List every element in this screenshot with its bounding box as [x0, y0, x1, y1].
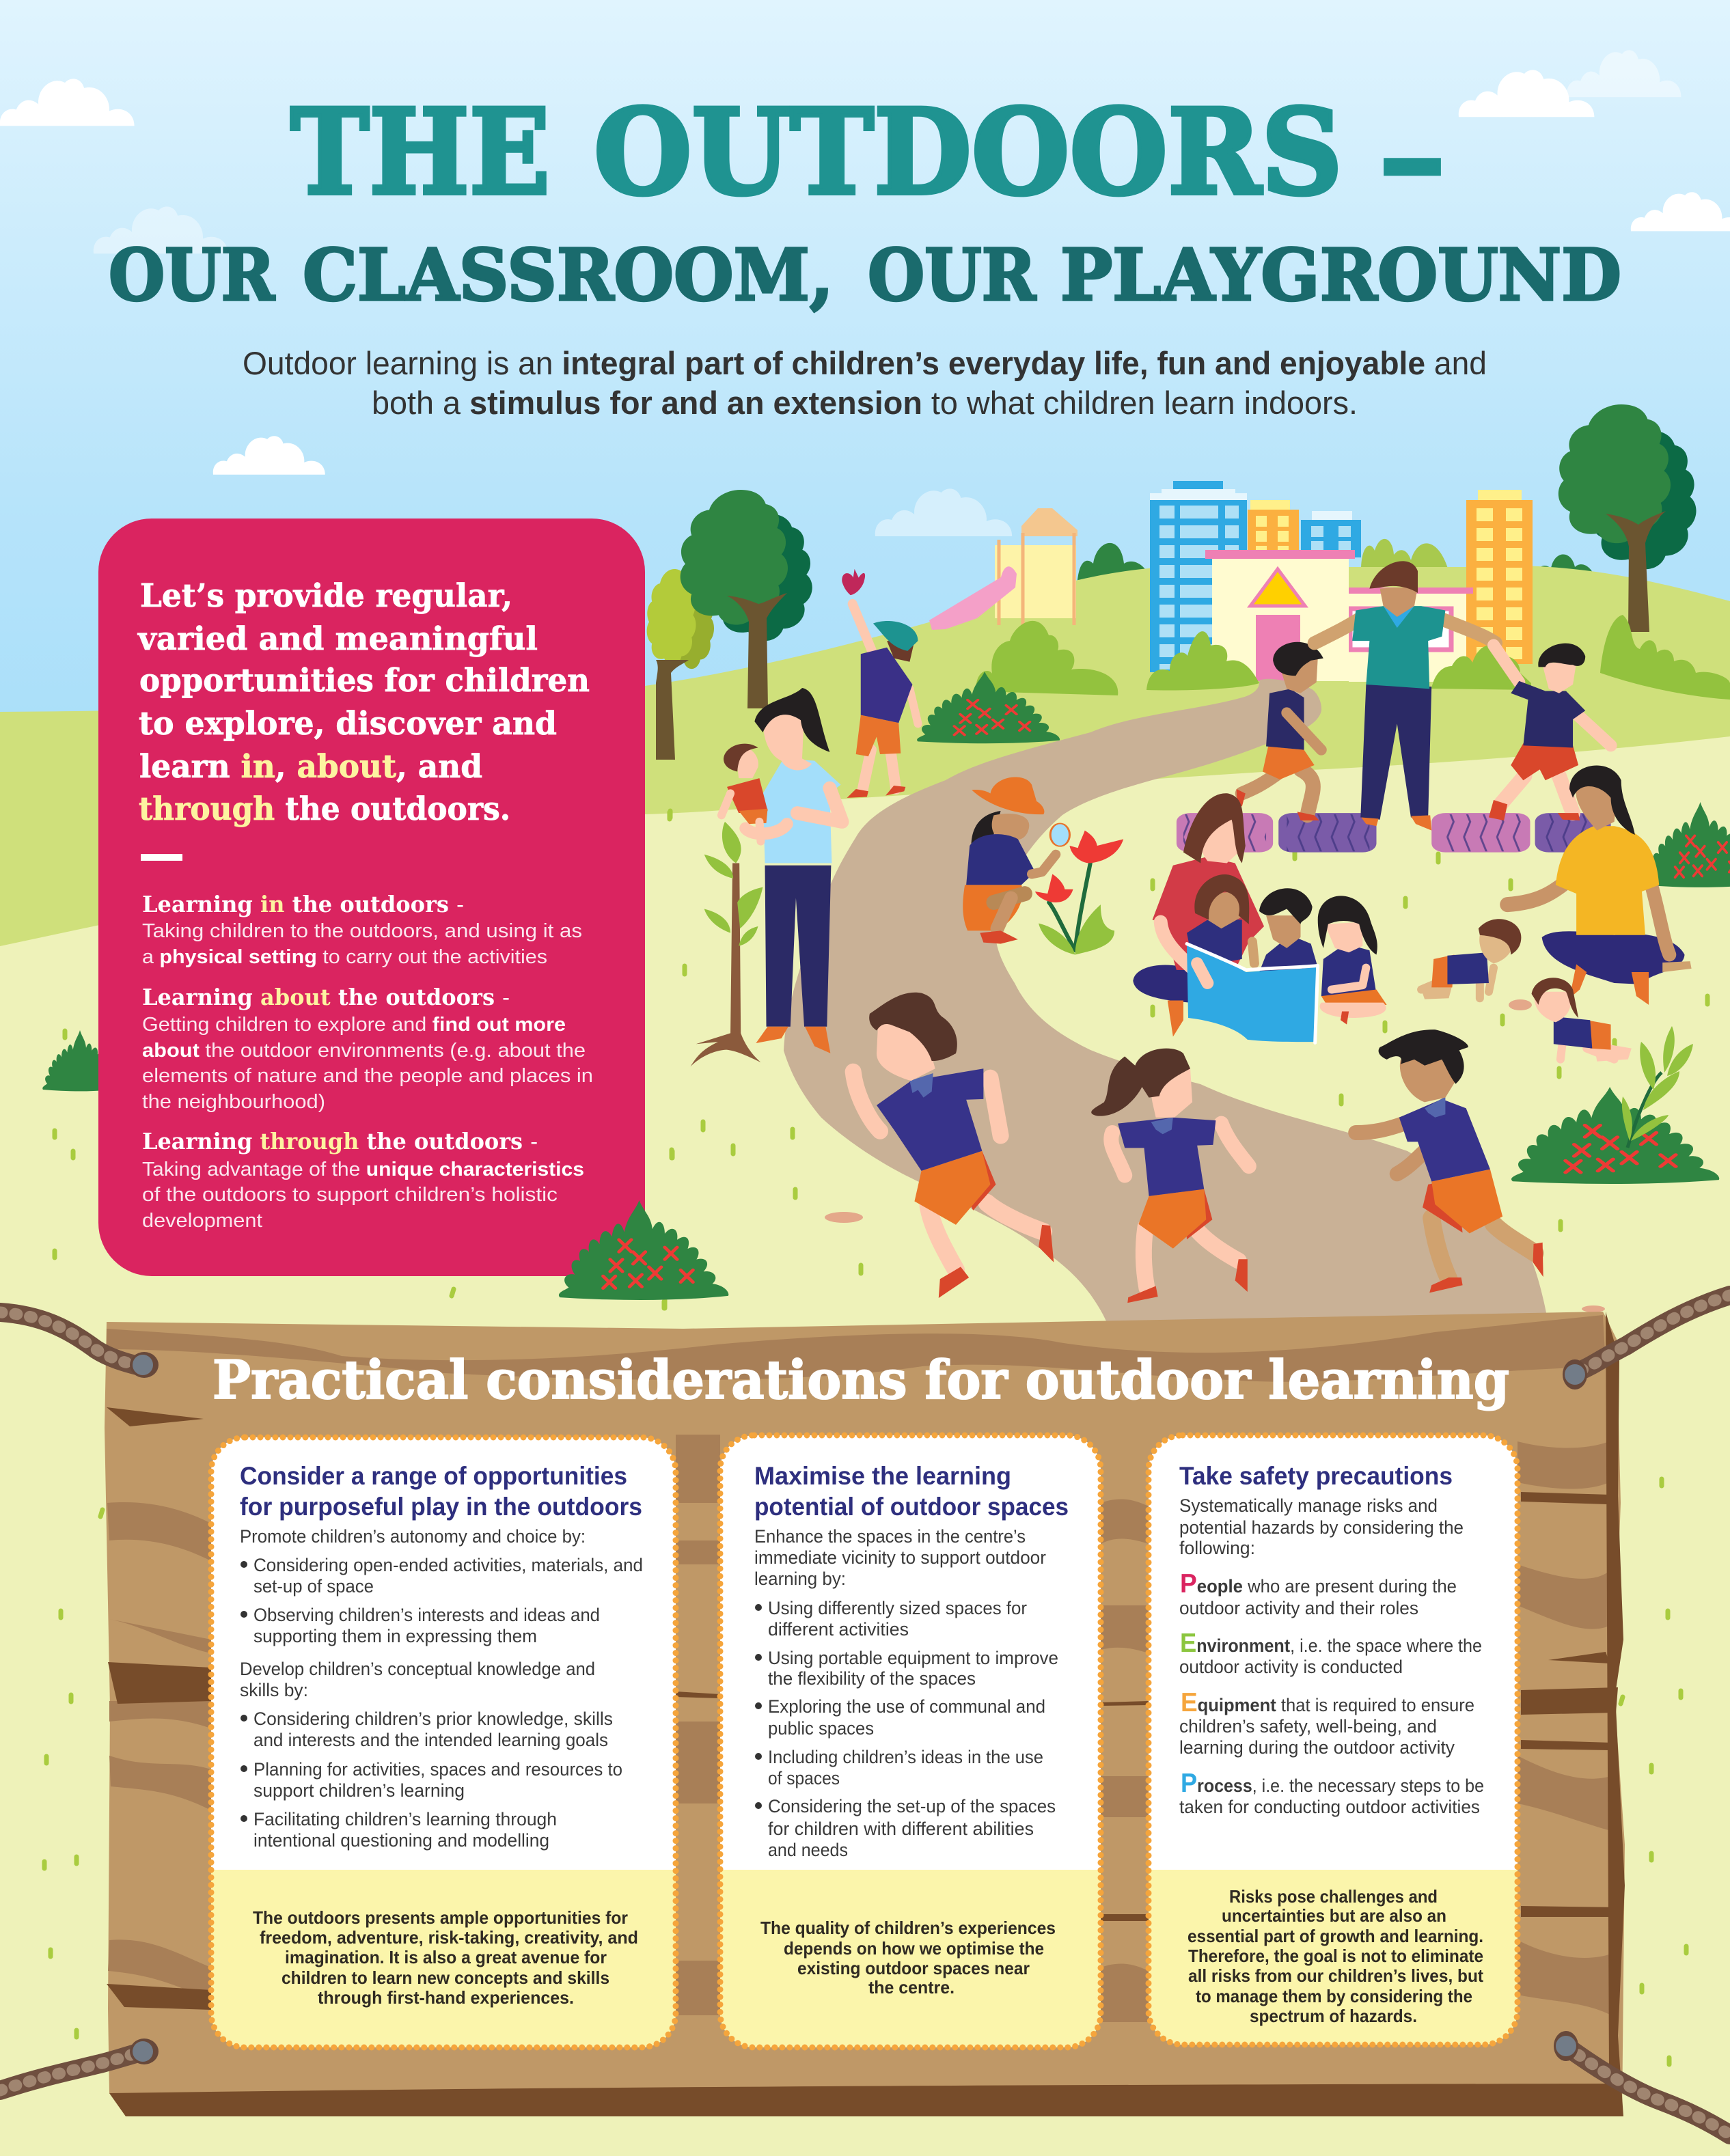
- teacher in teal shirt: [1315, 561, 1496, 831]
- learning through: [142, 1128, 584, 1232]
- pebbles: [825, 999, 1605, 1312]
- playground slide and tower: [929, 508, 1077, 630]
- background dark bushes: [1077, 539, 1595, 594]
- card two callout: depends on how we optimise the: [784, 1938, 1044, 1959]
- explorer girl with magnifier: [963, 777, 1069, 944]
- subtitle: PLAYGROUND: [1060, 233, 1621, 317]
- card three callout: [1187, 1886, 1483, 2026]
- grass ticks: [44, 811, 1707, 2064]
- crawling baby one: [1421, 919, 1521, 999]
- main title: [290, 83, 1446, 226]
- green hills: [0, 566, 1730, 946]
- road path: [784, 679, 1551, 1339]
- learning about: [142, 984, 593, 1113]
- boy walking on tires: [1237, 642, 1323, 820]
- card two callout: The quality of children’s experiences: [760, 1918, 1056, 1938]
- card two callout: the centre.: [868, 1977, 955, 1998]
- bush: left edge: [42, 1030, 122, 1091]
- runner three: [1356, 1029, 1543, 1293]
- card three callout: to manage them by considering the: [1196, 1986, 1472, 2006]
- card one body: Observing children’s interests and ideas and: [253, 1605, 600, 1625]
- card one body: skills by:: [240, 1680, 308, 1700]
- flower bush and plant: lower right: [1511, 1026, 1719, 1184]
- card one body: set-up of space: [253, 1576, 374, 1597]
- subtitle: [109, 233, 1621, 317]
- card two body: of spaces: [768, 1768, 840, 1788]
- card two body: and needs: [768, 1840, 848, 1860]
- card three intro: following:: [1179, 1538, 1255, 1558]
- card two heading: [754, 1462, 1069, 1521]
- card one callout: imagination. It is also a great avenue for: [285, 1947, 607, 1967]
- equipment: [1179, 1688, 1474, 1758]
- illustration: upper scene figures: [691, 561, 1692, 1066]
- equipment: children’s safety, well-being, and: [1179, 1716, 1437, 1737]
- ropes and nails: [0, 1295, 1730, 2135]
- panel headline: opportunities for children: [139, 662, 590, 700]
- learning about: Learning about the outdoors -: [142, 984, 510, 1010]
- card two body: immediate vicinity to support outdoor: [754, 1547, 1046, 1568]
- teacher in yellow sitting: [1507, 766, 1692, 1005]
- city buildings: [1150, 481, 1533, 672]
- tree: left green: [681, 490, 812, 708]
- boy on the right: [1489, 644, 1611, 820]
- flower bush: far right: [1644, 802, 1730, 887]
- clouds: [0, 50, 1730, 536]
- equipment: learning during the outdoor activity: [1179, 1737, 1455, 1758]
- card three callout: essential part of growth and learning.: [1187, 1926, 1483, 1946]
- panel headline: [137, 577, 590, 828]
- card three intro: Systematically manage risks and: [1179, 1495, 1438, 1516]
- pink panel: [98, 519, 645, 1276]
- card three intro: [1179, 1495, 1464, 1558]
- card one body: Facilitating children’s learning through: [253, 1809, 557, 1829]
- main title: OUTDOORS: [594, 83, 1343, 221]
- learning through: of the outdoors to support children’s holistic: [142, 1184, 558, 1206]
- card two: maximise spaces: [720, 1435, 1101, 2047]
- card one body: intentional questioning and modelling: [253, 1830, 549, 1851]
- flower bush: bottom of panel: [559, 1200, 728, 1300]
- card two body: Considering the set-up of the spaces: [768, 1796, 1056, 1816]
- card one body: Considering open-ended activities, materials, and: [253, 1555, 643, 1575]
- learning through: development: [142, 1210, 262, 1232]
- card three heading: Take safety precautions: [1179, 1462, 1453, 1490]
- card one: range of opportunities: [211, 1437, 676, 2047]
- woman holding baby: [722, 688, 842, 1053]
- card one body: Planning for activities, spaces and resources to: [253, 1759, 622, 1780]
- process: taken for conducting outdoor activities: [1179, 1797, 1480, 1817]
- card three callout: Therefore, the goal is not to eliminate: [1188, 1946, 1483, 1966]
- card one heading: for purposeful play in the outdoors: [240, 1493, 642, 1521]
- card one callout: The outdoors presents ample opportunities for: [253, 1907, 628, 1928]
- runner one: [853, 993, 1054, 1298]
- teacher reading to children: [1133, 793, 1264, 1036]
- learning about: elements of nature and the people and places in: [142, 1065, 593, 1087]
- people: [1179, 1569, 1457, 1618]
- environment: outdoor activity is conducted: [1179, 1657, 1403, 1677]
- card one callout: [253, 1907, 638, 2008]
- intro text: both a stimulus for and an extension to what children learn indoors.: [372, 385, 1358, 421]
- learning about: the neighbourhood): [142, 1091, 325, 1113]
- light green bushes: [976, 615, 1730, 700]
- card one callout: through first-hand experiences.: [318, 1987, 574, 2008]
- card two body: Exploring the use of communal and: [768, 1696, 1045, 1717]
- panel headline: varied and meaningful: [137, 620, 538, 658]
- card three intro: potential hazards by considering the: [1179, 1517, 1464, 1538]
- tires row: [1177, 813, 1611, 853]
- learning in: [142, 891, 582, 968]
- process: [1179, 1769, 1484, 1817]
- panel headline: Let’s provide regular,: [140, 577, 512, 615]
- card one body: and interests and the intended learning goals: [253, 1730, 608, 1750]
- learning in: Learning in the outdoors -: [142, 891, 464, 917]
- boy with teal cap and butterfly: [842, 569, 918, 798]
- tree: lime: [647, 569, 714, 760]
- card one body: Develop children’s conceptual knowledge and: [240, 1659, 595, 1679]
- people: People who are present during the: [1180, 1569, 1457, 1599]
- crawling baby two: [1532, 978, 1632, 1062]
- process: Process, i.e. the necessary steps to be: [1181, 1769, 1484, 1798]
- learning about: about the outdoor environments (e.g. about the: [142, 1040, 586, 1062]
- card one body: supporting them in expressing them: [253, 1626, 537, 1646]
- card two body: Using portable equipment to improve: [768, 1648, 1058, 1668]
- card three callout: Risks pose challenges and: [1229, 1886, 1438, 1907]
- card three callout: uncertainties but are also an: [1222, 1905, 1446, 1926]
- card one heading: Consider a range of opportunities: [240, 1462, 627, 1490]
- card three callout: spectrum of hazards.: [1250, 2006, 1417, 2026]
- children listening: [1187, 874, 1387, 1025]
- flower bush: behind slide: [917, 672, 1060, 743]
- open book: [1187, 944, 1318, 1042]
- card one callout: children to learn new concepts and skills: [282, 1967, 609, 1988]
- learning in: a physical setting to carry out the activities: [142, 946, 547, 968]
- main title: THE: [290, 83, 550, 221]
- learning about: Getting children to explore and find out more: [142, 1014, 566, 1036]
- card three: safety precautions: [1149, 1435, 1518, 2045]
- equipment: Equipment that is required to ensure: [1181, 1688, 1474, 1717]
- card two body: [754, 1526, 1058, 1860]
- environment: [1179, 1629, 1482, 1677]
- card two body: Using differently sized spaces for: [768, 1598, 1027, 1618]
- environment: Environment, i.e. the space where the: [1180, 1629, 1482, 1658]
- main title: –: [1379, 87, 1446, 226]
- section heading: Practical considerations for outdoor learning: [212, 1349, 1509, 1411]
- card three callout: all risks from our children’s lives, but: [1188, 1965, 1483, 1986]
- panel headline: learn in, about, and: [139, 748, 482, 786]
- runner two: [1091, 1049, 1249, 1303]
- red flowers: [1035, 831, 1123, 955]
- card one body: support children’s learning: [253, 1780, 465, 1801]
- subtitle: OUR: [868, 233, 1036, 317]
- wooden board: [105, 1312, 1625, 2116]
- intro text: [243, 345, 1487, 421]
- sky background: [0, 0, 1730, 751]
- card two body: public spaces: [768, 1718, 874, 1739]
- card two body: for children with different abilities: [768, 1819, 1034, 1839]
- card two body: the flexibility of the spaces: [768, 1668, 976, 1689]
- card one body: Promote children’s autonomy and choice by:: [240, 1526, 586, 1547]
- panel headline: through the outdoors.: [139, 790, 510, 828]
- card two callout: [760, 1918, 1056, 1998]
- card two body: different activities: [768, 1619, 909, 1640]
- card one callout: freedom, adventure, risk-taking, creativity, and: [260, 1927, 638, 1948]
- subtitle: OUR: [109, 233, 275, 317]
- card two callout: existing outdoor spaces near: [797, 1958, 1030, 1978]
- panel headline: to explore, discover and: [139, 705, 557, 743]
- subtitle: CLASSROOM,: [303, 233, 834, 317]
- card two body: Enhance the spaces in the centre’s: [754, 1526, 1026, 1547]
- learning through: Learning through the outdoors -: [142, 1128, 538, 1155]
- card two body: learning by:: [754, 1568, 846, 1589]
- intro text: Outdoor learning is an integral part of children’s everyday life, fun and enjoyable and: [243, 345, 1487, 381]
- tree: right big: [1559, 404, 1697, 632]
- card two heading: potential of outdoor spaces: [754, 1493, 1069, 1521]
- learning through: Taking advantage of the unique characteristics: [142, 1159, 584, 1180]
- card one body: [240, 1526, 643, 1851]
- card one body: Considering children’s prior knowledge, skills: [253, 1709, 613, 1729]
- people: outdoor activity and their roles: [1179, 1598, 1418, 1618]
- school building: [1205, 550, 1473, 682]
- ground: [0, 724, 1730, 2156]
- learning in: Taking children to the outdoors, and using it as: [142, 920, 582, 942]
- card two body: Including children’s ideas in the use: [768, 1747, 1043, 1767]
- runners: [853, 993, 1543, 1303]
- sapling: [691, 822, 763, 1066]
- card two heading: Maximise the learning: [754, 1462, 1011, 1490]
- card one heading: [240, 1462, 642, 1521]
